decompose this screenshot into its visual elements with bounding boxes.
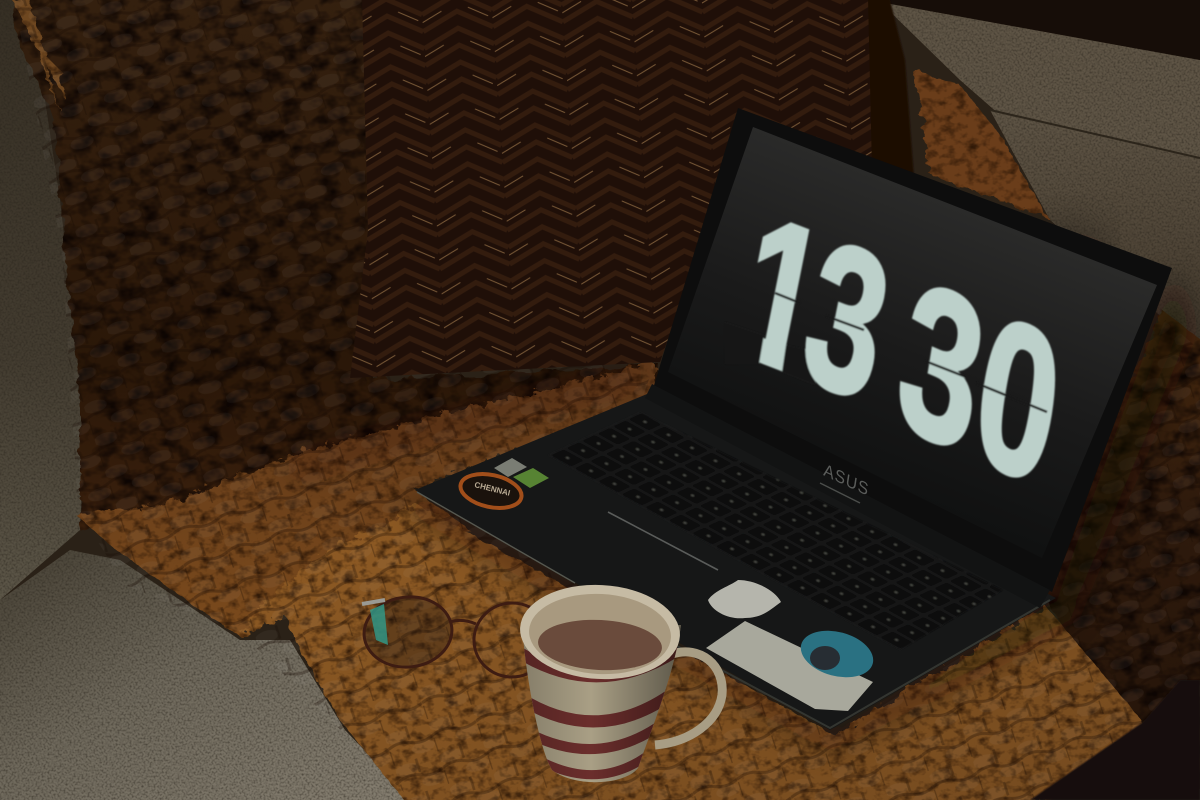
sofa seat [0, 550, 412, 800]
sticker: round orange badge [457, 469, 525, 513]
blanket front fold [240, 505, 1143, 800]
deep shadow between folds [290, 375, 640, 470]
dark top band [860, 0, 1200, 60]
sticker: blue circle photo [810, 646, 840, 670]
mug inner wall [527, 590, 673, 678]
sticker: blue circle [796, 623, 878, 685]
flip line on digit 3 second [925, 361, 966, 377]
right lens [470, 599, 554, 681]
sticker: round orange badge: CHENNAI [474, 480, 511, 498]
shadow right of laptop lid [1050, 225, 1100, 300]
dark corner bottom right [1030, 680, 1200, 800]
digit 3 of 13: 3 [788, 195, 905, 446]
sticker: white die-cut [708, 580, 781, 618]
base front edge lower [675, 600, 1050, 728]
flip line on digit 1 [775, 293, 800, 303]
laptop base [415, 392, 1056, 730]
blanket left edge highlight [12, 0, 65, 110]
keyboard [548, 412, 1003, 650]
bridge [450, 620, 476, 624]
flip line on digit 3 [834, 317, 865, 332]
sofa arm upper [880, 2, 1200, 165]
blanket middle fold [76, 362, 655, 636]
left lens [361, 593, 455, 671]
mug body stripes [524, 625, 681, 782]
blanket right side [1040, 310, 1200, 800]
lens reflection [370, 604, 388, 645]
screen panel [668, 127, 1157, 558]
glasses [361, 593, 554, 681]
coffee surface [537, 617, 663, 673]
blanket upper right lit piece [915, 70, 1048, 218]
flip line on digit 0 [976, 383, 1047, 412]
cover for left foot of digit 1 [738, 330, 764, 364]
sticker: green square [513, 468, 549, 488]
stripe bands [515, 645, 685, 775]
touchpad edge line [608, 512, 718, 570]
ASUS logo: ASUS [822, 460, 870, 500]
laptop [415, 108, 1172, 730]
sofa back cushion [0, 0, 85, 600]
arm seam [990, 110, 1200, 158]
coffee mug [510, 581, 722, 790]
digit 1 of 13: 1 [723, 170, 840, 421]
hinge strip [645, 384, 1050, 608]
pillow with chevron pattern [350, 0, 872, 378]
digits 30: 30 [885, 232, 1075, 532]
laptop shadow [410, 270, 1190, 750]
hinge light line [820, 483, 860, 503]
mug rim [518, 581, 682, 683]
sticker: white card [706, 621, 873, 711]
sticker: grey square [494, 458, 527, 477]
mug handle [655, 652, 722, 745]
frame tip [362, 600, 385, 604]
lid outer frame [652, 108, 1172, 592]
cover for right foot of digit 1 [782, 345, 820, 385]
sofa arm lower [990, 110, 1200, 350]
base front edge highlight [417, 492, 575, 583]
clock digits on screen [756, 222, 1056, 479]
blanket upper left dark section [10, 0, 660, 530]
blanket upper right dark shade [860, 0, 915, 190]
